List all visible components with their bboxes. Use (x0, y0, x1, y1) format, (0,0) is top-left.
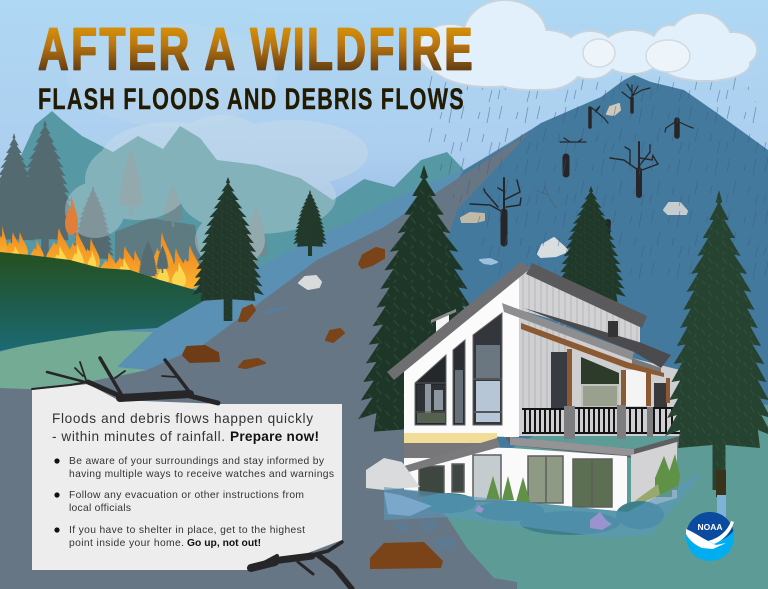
dark green hill (0, 252, 212, 351)
window triangular (415, 355, 446, 425)
bullet one: Be aware of your surroundings and stay informed by (69, 456, 325, 467)
background grey conifers (0, 120, 161, 282)
light blue slope (100, 130, 530, 420)
roof vent (608, 321, 618, 337)
title (38, 16, 475, 116)
lower side wall (631, 442, 677, 512)
pale green lake (0, 331, 153, 390)
bullet three: Go up, not out! (187, 538, 261, 549)
front white wall (404, 268, 519, 437)
shrubs (486, 454, 680, 507)
panel lead text: Floods and debris flows happen quickly (52, 411, 313, 426)
backing wall under roof (504, 312, 680, 436)
pale trees inside the smoke (118, 148, 269, 265)
chimney (431, 309, 456, 338)
rain (425, 72, 768, 280)
house (387, 262, 680, 512)
fire (0, 195, 202, 290)
bottom fallen branch (251, 542, 352, 589)
window tall (473, 313, 502, 425)
deck glass (581, 357, 619, 408)
smoke clouds (65, 115, 368, 268)
stump with branches (665, 120, 693, 136)
panel lead text line two (52, 429, 319, 444)
cloud fill merge (419, 1, 756, 89)
rain clouds (418, 0, 757, 90)
balcony railing (522, 408, 680, 434)
NOAA logo: NOAA (697, 522, 723, 532)
plants under flood water (420, 493, 664, 535)
faded fallen branch (535, 187, 556, 208)
top fallen branch (32, 358, 218, 403)
tree behind house left (358, 165, 490, 475)
lower windows (419, 455, 612, 507)
big burned mountain (384, 75, 768, 480)
front cloud puffs (583, 39, 690, 72)
debris flow boulder large (370, 542, 443, 569)
deck slab (506, 436, 680, 458)
wood posts (567, 349, 670, 409)
lower awning roof (391, 438, 500, 476)
right foreground conifer (665, 190, 768, 519)
info panel (32, 384, 342, 570)
mid-slope rocks (461, 104, 687, 264)
sky background (0, 0, 768, 300)
gable roof fascia (387, 262, 531, 380)
brown boulders on the slope (183, 248, 384, 368)
faint smoke over sky (67, 23, 277, 127)
wood beam (521, 323, 664, 377)
large burned tree (610, 142, 658, 195)
teal flooded ground (430, 395, 768, 589)
tree behind house centre (556, 186, 626, 321)
teal distant mountains (0, 111, 480, 300)
burned tree top (622, 84, 650, 112)
broken tree (590, 106, 608, 127)
grey debris flow path (0, 132, 530, 589)
subtitle: FLASH FLOODS AND DEBRIS FLOWS (38, 81, 465, 116)
window narrow (453, 340, 465, 425)
foothill ridge (115, 218, 205, 285)
yellow soffit band (404, 433, 497, 443)
flooded rocks (384, 492, 455, 549)
soffit band over lower windows (404, 443, 500, 458)
stump by tree (607, 222, 608, 236)
large burned tree front (470, 178, 521, 243)
bullet two (54, 490, 304, 514)
standing green conifers on the slope (192, 177, 327, 321)
NOAA logo (686, 512, 734, 561)
lower white wall (404, 445, 627, 512)
white corner column (504, 310, 519, 437)
rock beside house (366, 458, 420, 490)
panel lead text line two: - within minutes of rainfall. (52, 429, 225, 444)
flood water over house base (384, 472, 704, 538)
panel lead text line two: Prepare now! (230, 429, 319, 444)
burned trees (470, 84, 693, 243)
deck white panel (626, 370, 647, 406)
flowers in flood water (475, 505, 612, 530)
dark roof slope (524, 308, 671, 368)
bullet three: If you have to shelter in place, get to the highest (69, 525, 305, 536)
bullet two: Follow any evacuation or other instructions from (69, 490, 304, 501)
roof soffit (632, 358, 661, 375)
title: AFTER A WILDFIRE (38, 16, 475, 82)
deck door (551, 352, 567, 408)
middle roof fascia (502, 303, 634, 360)
bullet three (54, 525, 305, 549)
bullet three: point inside your home. (69, 538, 184, 549)
stump and log (560, 138, 586, 174)
upper rear wall (519, 266, 640, 345)
upper roof edge (526, 263, 647, 328)
bullet one (54, 456, 334, 480)
bullet one: having multiple ways to receive watches and warnings (69, 469, 334, 480)
balcony pillars (564, 405, 653, 439)
bullet two: local officials (69, 503, 131, 514)
